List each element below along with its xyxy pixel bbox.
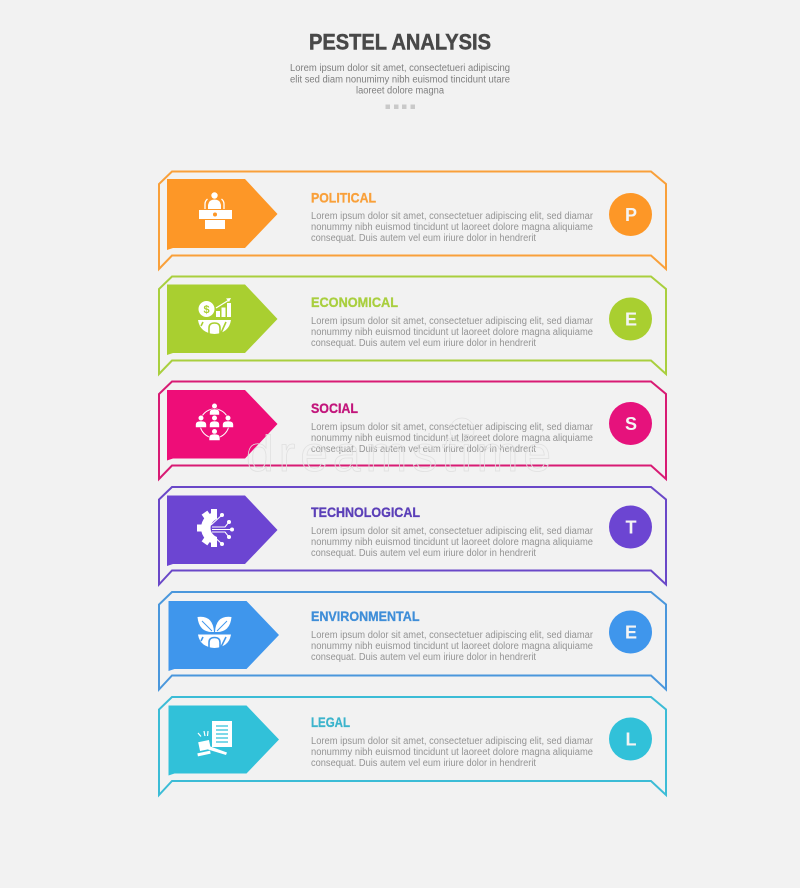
letter badge: S xyxy=(625,414,637,434)
letter badge: E xyxy=(625,310,637,330)
subtitle: Lorem ipsum dolor sit amet, consectetueri adipiscing xyxy=(290,63,510,74)
description xyxy=(311,736,594,769)
arrow tag xyxy=(167,496,278,566)
arrow tag xyxy=(167,179,278,250)
description: Lorem ipsum dolor sit amet, consectetuer adipiscing elit, sed diamar xyxy=(311,526,594,537)
letter badge xyxy=(609,402,652,445)
description xyxy=(311,422,594,455)
description: consequat. Duis autem vel eum iriure dolor in hendrerit xyxy=(311,652,536,663)
description: consequat. Duis autem vel eum iriure dolor in hendrerit xyxy=(311,233,536,244)
description: nonummy nibh euismod tincidunt ut laoreet dolore magna aliquiame xyxy=(311,433,593,444)
outline xyxy=(159,172,666,269)
letter badge xyxy=(609,718,652,760)
description: consequat. Duis autem vel eum iriure dolor in hendrerit xyxy=(311,444,536,455)
subtitle: laoreet dolore magna xyxy=(356,86,444,96)
heading: TECHNOLOGICAL xyxy=(311,505,420,520)
title block xyxy=(290,30,510,109)
outline xyxy=(159,697,666,795)
letter badge xyxy=(609,298,652,340)
description xyxy=(311,630,594,663)
arrow tag xyxy=(168,601,279,671)
description: Lorem ipsum dolor sit amet, consectetuer adipiscing elit, sed diamar xyxy=(311,316,594,327)
panel: technological xyxy=(159,487,666,584)
outline xyxy=(159,592,666,690)
description xyxy=(311,526,594,559)
outline xyxy=(159,487,666,584)
watermark: dreamstime xyxy=(246,426,551,482)
title dots xyxy=(386,104,415,109)
description: Lorem ipsum dolor sit amet, consectetuer adipiscing elit, sed diamar xyxy=(311,211,594,222)
outline xyxy=(159,276,666,374)
letter badge: E xyxy=(625,622,637,642)
heading: ENVIRONMENTAL xyxy=(311,609,420,624)
description: Lorem ipsum dolor sit amet, consectetuer adipiscing elit, sed diamar xyxy=(311,736,594,747)
panel: environmental xyxy=(159,592,666,690)
arrow tag xyxy=(167,284,278,355)
arrow tag xyxy=(168,706,279,776)
letter badge: L xyxy=(626,730,636,750)
icon: people network xyxy=(196,403,234,440)
outline xyxy=(159,382,666,479)
panel: political xyxy=(159,172,666,269)
icon: money growth in bowl xyxy=(198,298,231,334)
description: nonummy nibh euismod tincidunt ut laoreet dolore magna aliquiame xyxy=(311,641,593,652)
description xyxy=(311,211,594,244)
panel: economical xyxy=(159,276,666,374)
icon: money growth in bowl: $ xyxy=(203,304,210,316)
icon: gavel and document xyxy=(197,721,232,756)
description: Lorem ipsum dolor sit amet, consectetuer adipiscing elit, sed diamar xyxy=(311,422,594,433)
letter badge xyxy=(609,610,652,654)
letter badge xyxy=(609,193,652,236)
letter badge: P xyxy=(625,205,637,225)
icon: gear with circuit xyxy=(197,509,234,547)
description: nonummy nibh euismod tincidunt ut laoreet dolore magna aliquiame xyxy=(311,327,593,338)
panel: social xyxy=(159,382,666,479)
description xyxy=(311,316,594,349)
description: nonummy nibh euismod tincidunt ut laoreet dolore magna aliquiame xyxy=(311,222,593,233)
letter badge xyxy=(609,506,652,548)
description: Lorem ipsum dolor sit amet, consectetuer adipiscing elit, sed diamar xyxy=(311,630,594,641)
heading: POLITICAL xyxy=(311,190,376,206)
title: PESTEL ANALYSIS xyxy=(309,30,491,54)
icon: plant in bowl xyxy=(198,617,232,648)
heading: SOCIAL xyxy=(311,401,358,416)
description: consequat. Duis autem vel eum iriure dolor in hendrerit xyxy=(311,758,536,769)
letter badge: T xyxy=(626,518,636,538)
description: consequat. Duis autem vel eum iriure dolor in hendrerit xyxy=(311,338,536,349)
subtitle xyxy=(290,63,510,96)
panel: legal xyxy=(159,697,666,795)
arrow tag xyxy=(167,390,278,460)
heading: LEGAL xyxy=(311,715,350,730)
subtitle: elit sed diam nonumimy nibh euismod tincidunt utare xyxy=(290,74,510,86)
description: nonummy nibh euismod tincidunt ut laoreet dolore magna aliquiame xyxy=(311,747,593,758)
description: consequat. Duis autem vel eum iriure dolor in hendrerit xyxy=(311,548,536,559)
icon: podium speaker xyxy=(199,192,232,229)
heading: ECONOMICAL xyxy=(311,295,398,310)
description: nonummy nibh euismod tincidunt ut laoreet dolore magna aliquiame xyxy=(311,537,593,548)
